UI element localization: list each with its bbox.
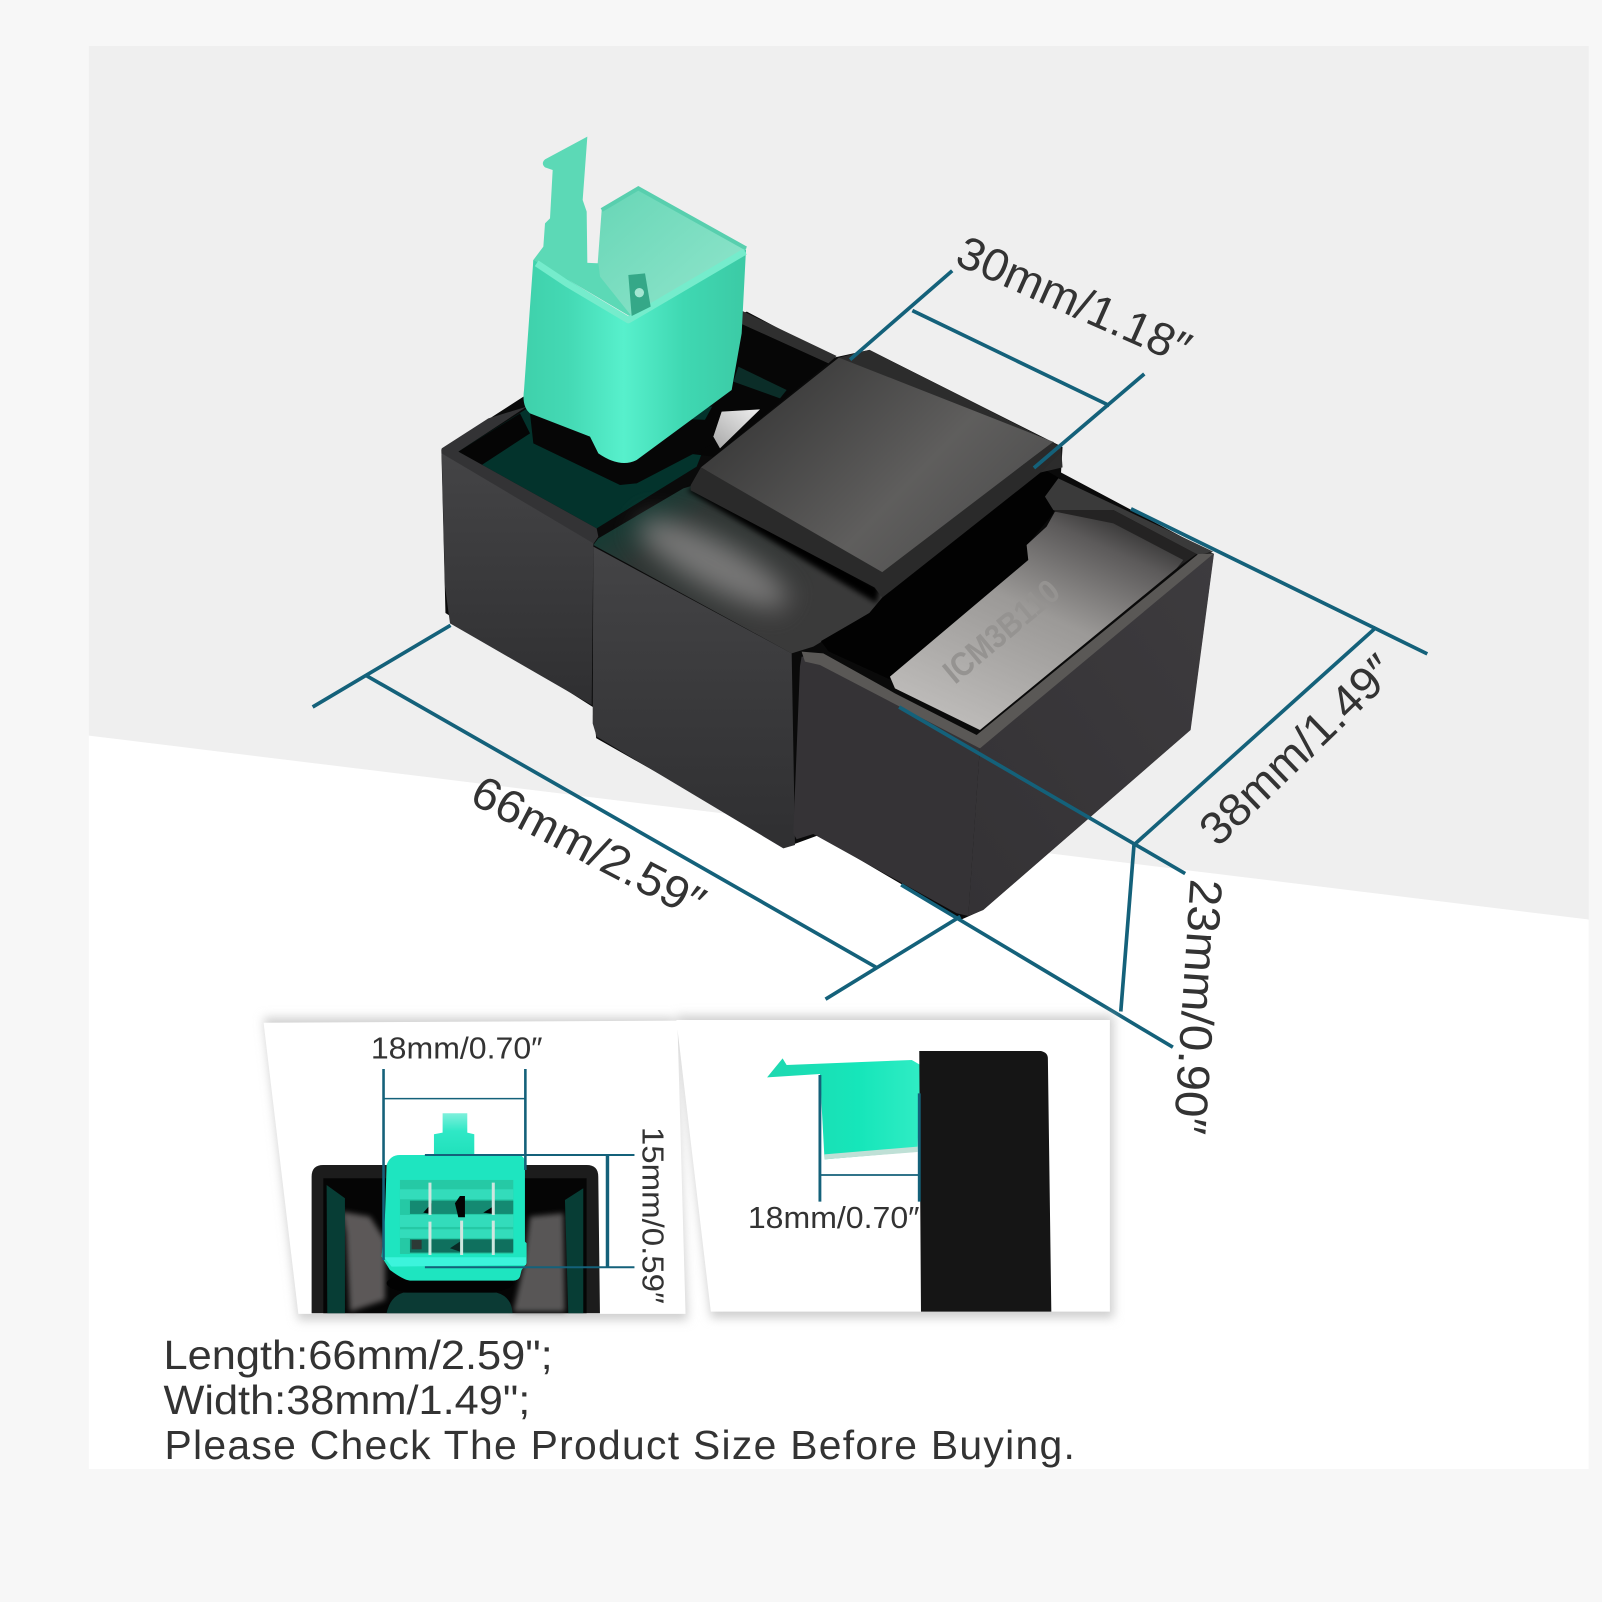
white lower panel	[89, 736, 1589, 1469]
back rim and silver contact	[687, 311, 837, 457]
pocket shadows	[412, 1196, 494, 1252]
dimension: 38mm	[899, 509, 1427, 874]
connector body	[382, 1155, 527, 1281]
label: 18mm side: 18mm/0.70″	[748, 1201, 920, 1235]
inner left wall	[533, 260, 633, 318]
silver contact	[713, 409, 760, 448]
lip shadow	[687, 483, 880, 603]
strap lip	[691, 442, 1061, 598]
back wall	[597, 188, 747, 318]
right block	[793, 478, 1214, 916]
middle block front face	[593, 547, 795, 848]
label: 15mm: 15mm/0.59″	[636, 1127, 670, 1304]
recess	[687, 323, 828, 457]
wall rim	[602, 188, 746, 248]
label: 66mm: 66mm/2.59″	[463, 765, 714, 929]
inset panel shadows	[264, 1016, 1114, 1320]
strap back edge	[839, 350, 1063, 473]
connector body	[524, 249, 746, 463]
lip highlight	[537, 252, 745, 320]
green connector	[524, 137, 747, 463]
18mm width dimension	[384, 1069, 525, 1260]
right teal strip	[565, 1188, 583, 1313]
note: width: Width:38mm/1.49";	[163, 1377, 530, 1423]
upper pockets	[410, 1201, 513, 1214]
label: 38mm: 38mm/1.49″	[1189, 644, 1405, 855]
latch tab	[533, 137, 600, 280]
label: 23mm: 23mm/0.90″	[1164, 878, 1233, 1136]
recess shadow	[1053, 510, 1197, 568]
lower pockets	[410, 1239, 513, 1253]
connector photo	[312, 1113, 600, 1313]
18mm depth dimension	[820, 1075, 919, 1202]
bottom highlight	[384, 1257, 526, 1267]
note: length: Length:66mm/2.59";	[163, 1332, 553, 1378]
rear block	[442, 407, 882, 848]
strap and gap	[691, 350, 1063, 679]
product: ignition module	[441, 137, 1214, 920]
top rim	[442, 407, 598, 544]
size note	[163, 1332, 1075, 1468]
top rim	[802, 553, 1214, 748]
module silhouette	[441, 312, 1214, 920]
highlight	[629, 504, 798, 623]
latch tab	[434, 1113, 474, 1158]
label: 18mm top: 18mm/0.70″	[371, 1031, 543, 1065]
15mm height dimension	[425, 1155, 634, 1267]
dimension lines	[384, 1069, 634, 1267]
front face	[442, 453, 593, 705]
housing	[312, 1165, 600, 1313]
left teal strip	[327, 1185, 345, 1313]
shadow below connector	[387, 1271, 513, 1296]
dimension: 30mm	[850, 271, 1144, 468]
front face	[793, 657, 980, 916]
connector pins	[430, 1183, 493, 1255]
side face	[968, 554, 1214, 916]
panel background	[264, 1021, 686, 1314]
connector base	[530, 413, 713, 485]
cavity	[323, 1178, 587, 1313]
embossed model text: ICM3B110	[936, 573, 1067, 691]
terminal pin	[628, 273, 651, 316]
back rim	[740, 311, 837, 363]
cavity shadow	[458, 413, 530, 465]
inset: connector side view	[676, 1020, 1110, 1312]
back rim	[1045, 478, 1213, 555]
dimension: 23mm	[901, 844, 1173, 1047]
label plate	[890, 512, 1183, 730]
connector cavity	[400, 1180, 513, 1254]
cavity	[458, 407, 720, 528]
inset: connector front view	[264, 1021, 686, 1314]
left reflection	[342, 1212, 385, 1312]
black module side	[919, 1051, 1051, 1312]
panel background	[676, 1020, 1110, 1312]
lower reflection	[387, 1293, 513, 1313]
dimension: 66mm	[313, 625, 960, 999]
teal reflection	[733, 367, 787, 398]
label: 30mm: 30mm/1.18″	[949, 225, 1199, 375]
connector edge highlight	[825, 1147, 918, 1159]
note: check size: Please Check The Product Size Before Buying.	[164, 1422, 1075, 1468]
black gap	[821, 467, 1058, 679]
strap pad	[701, 358, 1053, 575]
connector bands	[400, 1189, 513, 1238]
dimension lines	[313, 271, 1427, 1047]
middle block top	[593, 483, 882, 653]
green connector side	[767, 1058, 920, 1159]
right reflection	[513, 1213, 565, 1312]
